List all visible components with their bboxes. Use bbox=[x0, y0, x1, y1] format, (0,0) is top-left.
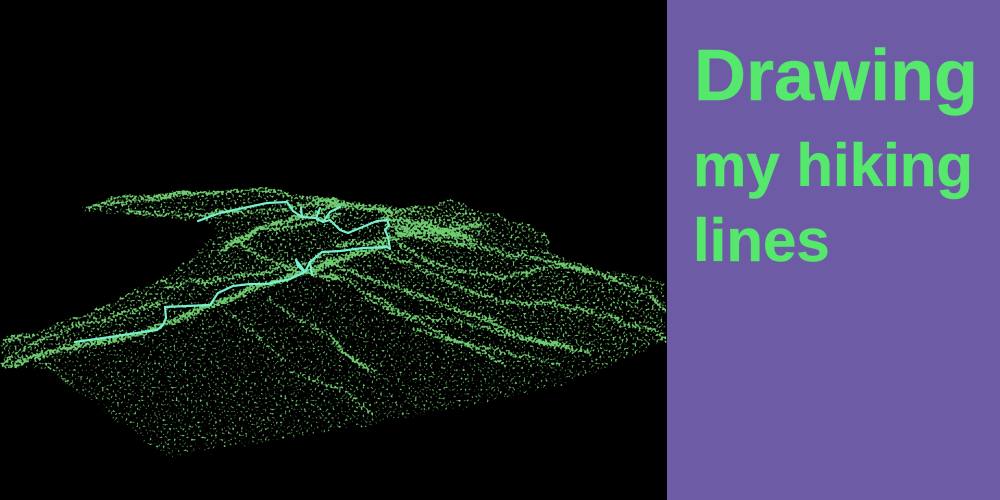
heading: lines: lines bbox=[693, 207, 830, 274]
back plateau density bbox=[0, 188, 667, 365]
heading: my hiking: my hiking bbox=[693, 132, 973, 199]
back plateau ridge lines bbox=[80, 190, 480, 277]
title panel bbox=[667, 0, 1000, 500]
central hub density bbox=[380, 210, 500, 245]
front ridge lines bbox=[0, 245, 385, 413]
terrain visualization panel bbox=[0, 187, 666, 458]
terrain base surface bbox=[0, 188, 667, 457]
heading: Drawing: Drawing bbox=[694, 36, 978, 116]
point cloud terrain bbox=[0, 188, 667, 457]
hiking trail line bbox=[75, 202, 390, 342]
trail: main route bbox=[75, 202, 390, 342]
right ridge lines bbox=[330, 198, 667, 373]
trail: branch bbox=[301, 207, 340, 275]
